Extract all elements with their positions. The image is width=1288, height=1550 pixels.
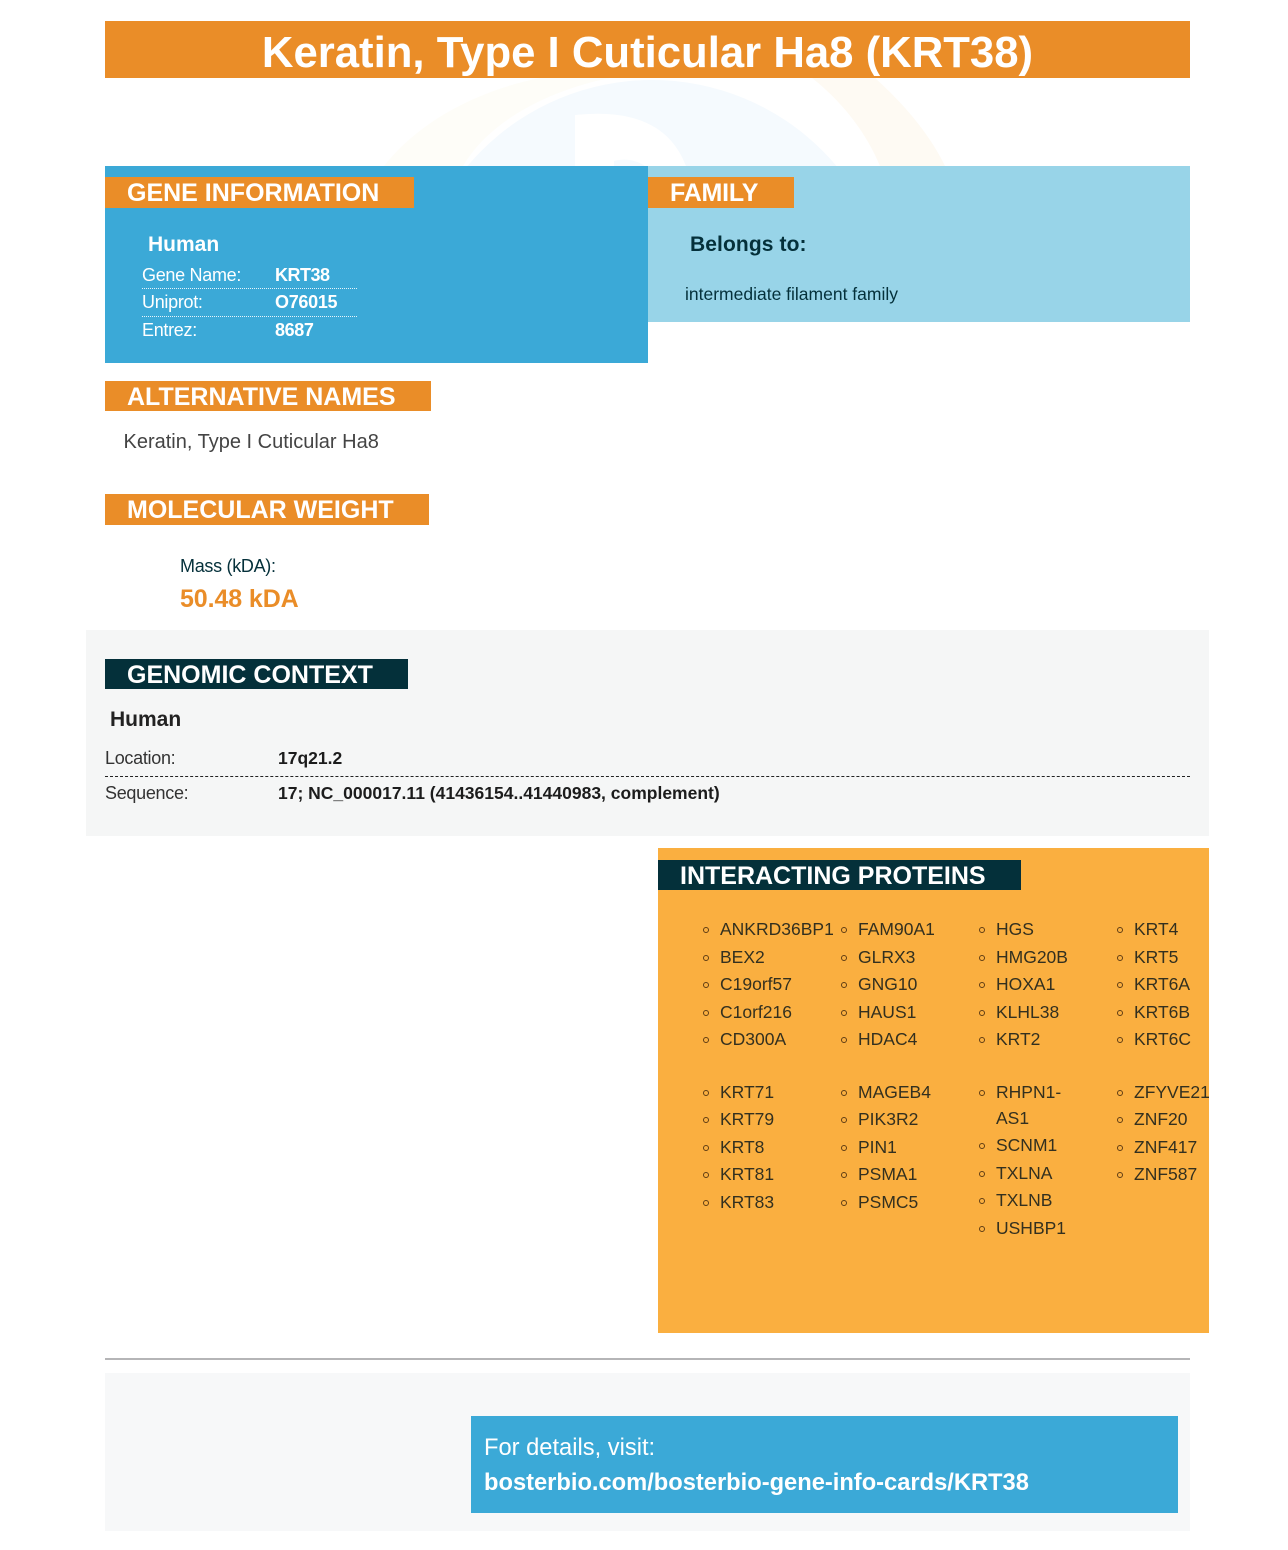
title banner: Keratin, Type I Cuticular Ha8 (KRT38) bbox=[262, 28, 1033, 77]
title banner bbox=[105, 21, 1190, 78]
protein list: C1orf216 bbox=[720, 1002, 792, 1022]
protein list: ZNF417 bbox=[1134, 1137, 1197, 1157]
protein list: FAM90A1 bbox=[858, 919, 935, 939]
protein list: C19orf57 bbox=[720, 974, 792, 994]
protein list: ZFYVE21 bbox=[1134, 1082, 1210, 1102]
protein list: KRT6A bbox=[1134, 974, 1190, 994]
location row: Location: bbox=[105, 748, 175, 768]
protein list: GLRX3 bbox=[858, 947, 915, 967]
heading: gene information: GENE INFORMATION bbox=[127, 179, 379, 207]
protein list: KLHL38 bbox=[996, 1002, 1059, 1022]
protein list: CD300A bbox=[720, 1029, 786, 1049]
uniprot row bbox=[142, 290, 357, 317]
heading: genomic context: GENOMIC CONTEXT bbox=[127, 661, 373, 689]
protein list: KRT6C bbox=[1134, 1029, 1191, 1049]
protein list: KRT6B bbox=[1134, 1002, 1190, 1022]
panel: genomic context bbox=[86, 630, 1209, 836]
protein list: USHBP1 bbox=[996, 1218, 1066, 1238]
protein list: KRT79 bbox=[720, 1109, 774, 1129]
protein list: TXLNA bbox=[996, 1163, 1052, 1183]
protein list: MAGEB4 bbox=[858, 1082, 931, 1102]
panel: genomic context: 17; NC_000017.11 (41436154..41440983, complement) bbox=[278, 783, 720, 803]
protein list: HMG20B bbox=[996, 947, 1068, 967]
details url: bosterbio.com/bosterbio-gene-info-cards/KRT38 bbox=[484, 1470, 1029, 1496]
uniprot row: Uniprot: bbox=[142, 292, 203, 312]
protein list: KRT8 bbox=[720, 1137, 764, 1157]
protein list: KRT5 bbox=[1134, 947, 1178, 967]
protein list: ANKRD36BP1 bbox=[720, 919, 834, 939]
heading: family bbox=[648, 177, 794, 208]
gene name row: Gene Name: bbox=[142, 265, 241, 285]
sequence row: Sequence: bbox=[105, 783, 188, 803]
mass label: Mass (kDA): bbox=[180, 556, 276, 576]
panel: gene information bbox=[105, 166, 648, 363]
protein list: RHPN1- bbox=[996, 1082, 1061, 1102]
protein list: ZNF20 bbox=[1134, 1109, 1187, 1129]
alternative names text: Keratin, Type I Cuticular Ha8 bbox=[124, 431, 379, 453]
protein list: GNG10 bbox=[858, 974, 917, 994]
footer panel bbox=[105, 1373, 1190, 1531]
panel: interacting proteins bbox=[658, 848, 1209, 1333]
protein list: KRT4 bbox=[1134, 919, 1178, 939]
protein list: HAUS1 bbox=[858, 1002, 916, 1022]
protein list: KRT81 bbox=[720, 1164, 774, 1184]
gene name row: KRT38 bbox=[275, 265, 330, 285]
location row bbox=[105, 746, 1190, 777]
details label: For details, visit: bbox=[484, 1435, 655, 1461]
entrez row: Entrez: bbox=[142, 320, 197, 340]
sequence row bbox=[105, 783, 720, 803]
protein list: HGS bbox=[996, 919, 1034, 939]
protein list: PSMC5 bbox=[858, 1192, 918, 1212]
protein list: AS1 bbox=[996, 1108, 1029, 1128]
protein list: KRT83 bbox=[720, 1192, 774, 1212]
protein list: BEX2 bbox=[720, 947, 765, 967]
protein list: HOXA1 bbox=[996, 974, 1055, 994]
protein list: SCNM1 bbox=[996, 1135, 1057, 1155]
uniprot row: O76015 bbox=[275, 292, 337, 312]
gene name row bbox=[142, 263, 357, 289]
belongs to label: Belongs to: bbox=[690, 233, 807, 256]
heading: alternative names: ALTERNATIVE NAMES bbox=[127, 383, 396, 411]
heading: family: FAMILY bbox=[670, 179, 758, 207]
protein list bbox=[703, 919, 1210, 1238]
family value: intermediate filament family bbox=[685, 284, 898, 304]
entrez row bbox=[142, 320, 314, 340]
entrez row: 8687 bbox=[275, 320, 313, 340]
watermark logo bbox=[468, 78, 945, 166]
call to action box bbox=[471, 1416, 1178, 1513]
mass value: 50.48 kDA bbox=[180, 585, 299, 613]
species label: Human bbox=[148, 233, 219, 256]
protein list: PSMA1 bbox=[858, 1164, 917, 1184]
protein list: PIK3R2 bbox=[858, 1109, 918, 1129]
heading: molecular weight: MOLECULAR WEIGHT bbox=[127, 496, 394, 524]
protein list: TXLNB bbox=[996, 1190, 1052, 1210]
protein list: ZNF587 bbox=[1134, 1164, 1197, 1184]
species label: Human bbox=[110, 708, 181, 731]
protein list: PIN1 bbox=[858, 1137, 897, 1157]
protein list: KRT2 bbox=[996, 1029, 1040, 1049]
protein list: HDAC4 bbox=[858, 1029, 917, 1049]
location row: 17q21.2 bbox=[278, 748, 342, 768]
heading: interacting proteins: INTERACTING PROTEINS bbox=[680, 862, 986, 890]
panel: family bbox=[648, 166, 1190, 322]
protein list: KRT71 bbox=[720, 1082, 774, 1102]
